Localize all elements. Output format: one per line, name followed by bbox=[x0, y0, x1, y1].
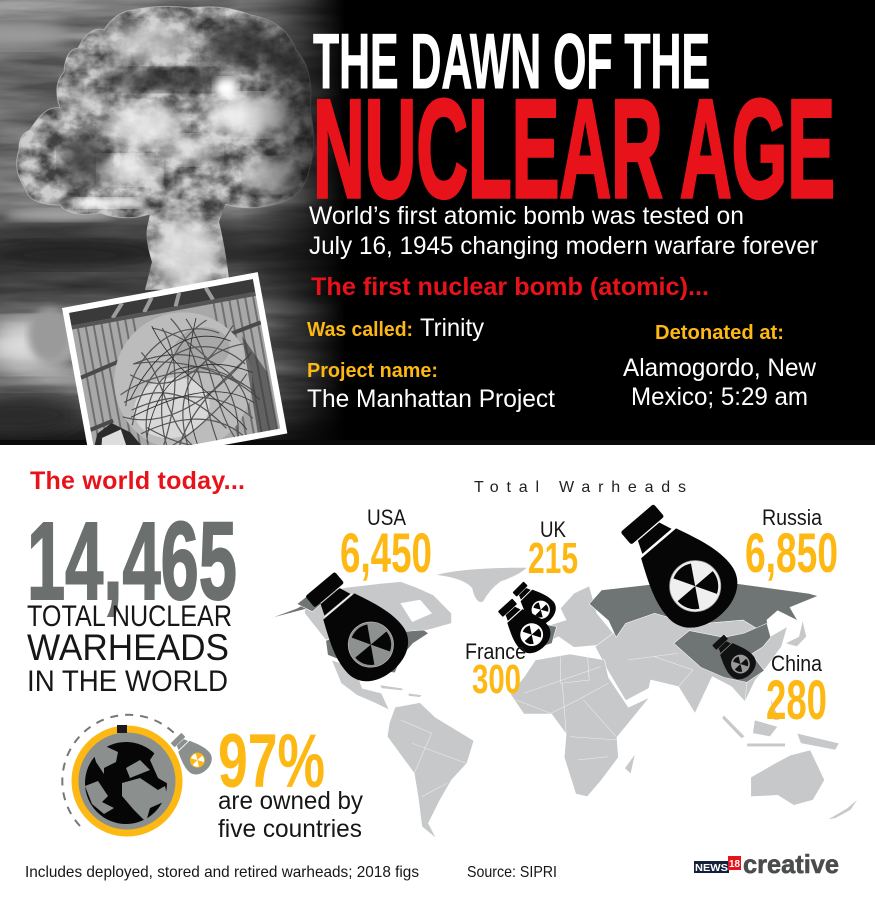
fact: detonated at: Detonated at: bbox=[655, 322, 784, 344]
map: Caribbean bbox=[380, 685, 422, 697]
label: France bbox=[465, 639, 526, 702]
label: UK: UK bbox=[540, 517, 566, 542]
map: Mexico and Central America bbox=[332, 660, 389, 710]
panel: white lower section bbox=[0, 445, 875, 900]
heading: first nuclear bomb: The first nuclear bomb (atomic)... bbox=[311, 273, 709, 301]
label: China: 280 bbox=[766, 668, 827, 731]
label: China: China bbox=[771, 651, 823, 676]
map: Asia bbox=[595, 613, 787, 713]
map: Madagascar bbox=[625, 753, 635, 774]
icon: USA bomb bbox=[292, 561, 420, 694]
map: Alaska bbox=[297, 595, 322, 612]
icon: small gray bomb bbox=[166, 728, 217, 779]
stat: 97 percent bbox=[218, 719, 363, 843]
label: USA: 6,450 bbox=[340, 521, 432, 584]
fact: detonated at: Alamogordo, New bbox=[623, 354, 817, 382]
map: China bbox=[674, 623, 771, 682]
logo: News18 creative: NEWS bbox=[695, 863, 728, 874]
map: Canada bbox=[305, 582, 452, 640]
map: Alaska tail bbox=[270, 604, 308, 618]
label: Russia bbox=[745, 505, 838, 584]
stat: 97 percent: five countries bbox=[218, 815, 362, 843]
intro text bbox=[309, 202, 818, 260]
stat: total warheads count bbox=[27, 500, 237, 698]
label: USA bbox=[340, 505, 432, 584]
intro text: World’s first atomic bomb was tested on bbox=[309, 202, 744, 230]
logo: News18 creative: creative bbox=[743, 849, 839, 879]
fact: project name bbox=[307, 360, 555, 413]
map: New Zealand bbox=[827, 798, 858, 820]
label: China bbox=[766, 651, 827, 731]
label: Russia: Russia bbox=[762, 505, 823, 530]
fact: detonated at bbox=[623, 322, 817, 411]
stat: total warheads count: TOTAL NUCLEAR bbox=[27, 600, 232, 633]
icon: Russia bomb bbox=[606, 491, 751, 642]
map: South America bbox=[387, 703, 474, 838]
fact: detonated at: Mexico; 5:29 am bbox=[631, 383, 808, 411]
logo: News18 creative bbox=[694, 849, 839, 879]
fact: was called: Was called: bbox=[307, 319, 413, 341]
map: Europe bbox=[545, 586, 616, 647]
intro text: July 16, 1945 changing modern warfare forever bbox=[309, 232, 818, 260]
map: Russia bbox=[589, 583, 818, 637]
photo: The Gadget test device in white frame bbox=[62, 272, 288, 445]
chart: world map bbox=[270, 567, 858, 838]
heading: total warheads: Total Warheads bbox=[474, 479, 686, 496]
source: Source: SIPRI bbox=[467, 864, 557, 881]
icon: globe ring with orbiting bomb bbox=[62, 715, 217, 833]
stat: total warheads count: IN THE WORLD bbox=[27, 665, 228, 698]
fact: was called bbox=[307, 314, 484, 342]
map: Australia bbox=[751, 750, 825, 805]
label: UK: 215 bbox=[528, 534, 578, 583]
stat: 97 percent: are owned by bbox=[218, 787, 363, 815]
label: USA: USA bbox=[367, 505, 406, 530]
icon: China bomb bbox=[707, 630, 761, 685]
map: USA bbox=[326, 630, 428, 673]
photo: mushroom cloud header background bbox=[0, 0, 875, 445]
logo: News18 creative: 18 bbox=[729, 859, 740, 870]
fact: project name: The Manhattan Project bbox=[307, 385, 555, 413]
icon: UK bomb bbox=[508, 577, 561, 630]
map: Africa bbox=[510, 654, 650, 797]
stat: total warheads count: WARHEADS bbox=[27, 627, 229, 668]
fact: was called: Trinity bbox=[420, 314, 484, 342]
stat: 97 percent: 97% bbox=[218, 719, 325, 804]
heading: the world today: The world today... bbox=[30, 467, 245, 495]
map: Hudson Bay bbox=[401, 600, 432, 622]
icon: France bomb bbox=[491, 593, 557, 660]
footnote: Includes deployed, stored and retired warheads; 2018 figs bbox=[25, 864, 419, 881]
fact: project name: Project name: bbox=[307, 360, 438, 382]
stat: total warheads count: 14,465 bbox=[27, 500, 237, 623]
label: UK bbox=[528, 517, 578, 583]
map: SE Asia islands bbox=[722, 697, 839, 750]
label: France: 300 bbox=[472, 656, 521, 702]
map: France bbox=[539, 623, 557, 647]
map: Greenland bbox=[435, 567, 528, 602]
label: France: France bbox=[465, 639, 526, 664]
map: Japan bbox=[785, 620, 807, 647]
